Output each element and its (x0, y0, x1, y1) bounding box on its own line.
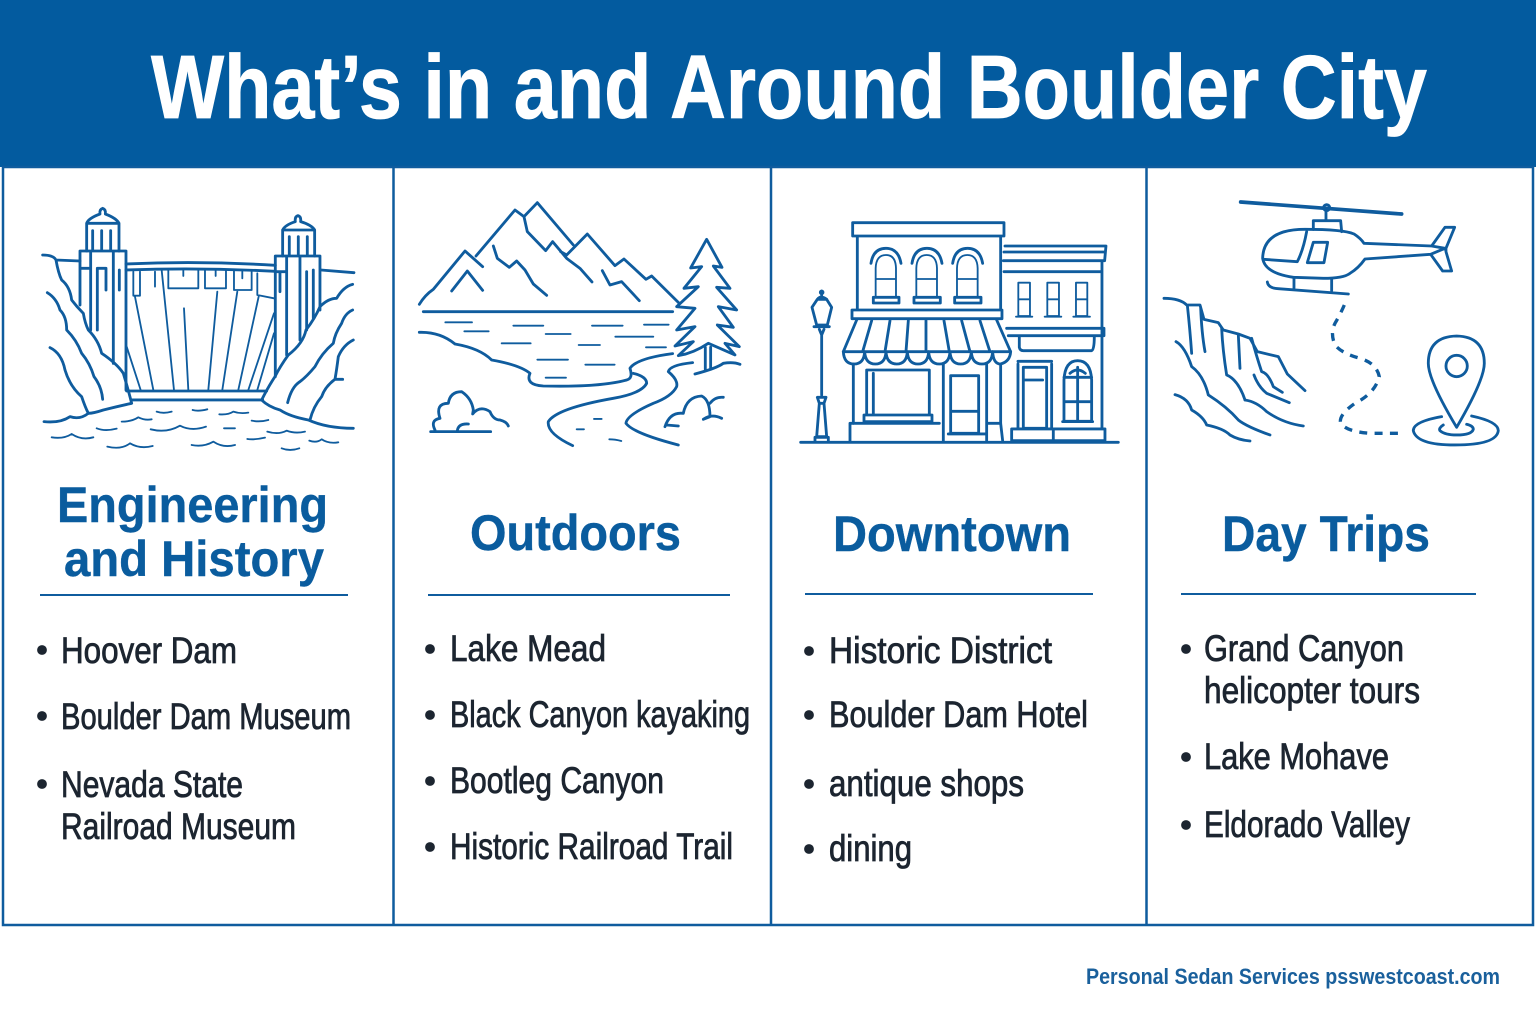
list: dining (829, 828, 912, 869)
heading: Downtown (833, 506, 1071, 562)
panel frame (3, 167, 1533, 925)
list (426, 628, 750, 867)
footer credit: Personal Sedan Services psswestcoast.com (1086, 964, 1500, 989)
list (38, 630, 351, 847)
list: Eldorado Valley (1204, 804, 1410, 845)
divider (40, 594, 348, 596)
list: Historic Railroad Trail (450, 826, 733, 867)
heading: Engineering (57, 477, 328, 533)
heading: Day Trips (1222, 506, 1430, 562)
header banner (0, 0, 1536, 167)
panel: engineering and history (38, 208, 354, 847)
list: Grand Canyon (1204, 628, 1404, 669)
list: Boulder Dam Museum (61, 696, 351, 737)
panel: outdoors (419, 203, 750, 867)
list: helicopter tours (1204, 670, 1420, 711)
list: Historic District (829, 630, 1053, 671)
icon: hoover dam (43, 208, 354, 450)
icon: mountains and lake (419, 203, 740, 446)
divider (1181, 593, 1476, 595)
divider (805, 593, 1093, 595)
list: Hoover Dam (61, 630, 237, 671)
list (1182, 628, 1420, 845)
list: Railroad Museum (61, 806, 296, 847)
list: Nevada State (61, 764, 243, 805)
list: antique shops (829, 763, 1024, 804)
list: Lake Mead (450, 628, 606, 669)
panel: downtown (801, 223, 1118, 869)
icon: storefronts (801, 223, 1118, 442)
heading: and History (64, 531, 324, 587)
heading: Outdoors (470, 505, 681, 561)
list: Bootleg Canyon (450, 760, 664, 801)
panel: day trips (1164, 202, 1498, 845)
list: Boulder Dam Hotel (829, 694, 1088, 735)
heading (57, 477, 328, 587)
divider (428, 594, 730, 596)
list: Lake Mohave (1204, 736, 1389, 777)
list (804, 630, 1088, 869)
list: Black Canyon kayaking (450, 694, 750, 735)
icon: helicopter, canyon and map pin (1164, 202, 1498, 445)
